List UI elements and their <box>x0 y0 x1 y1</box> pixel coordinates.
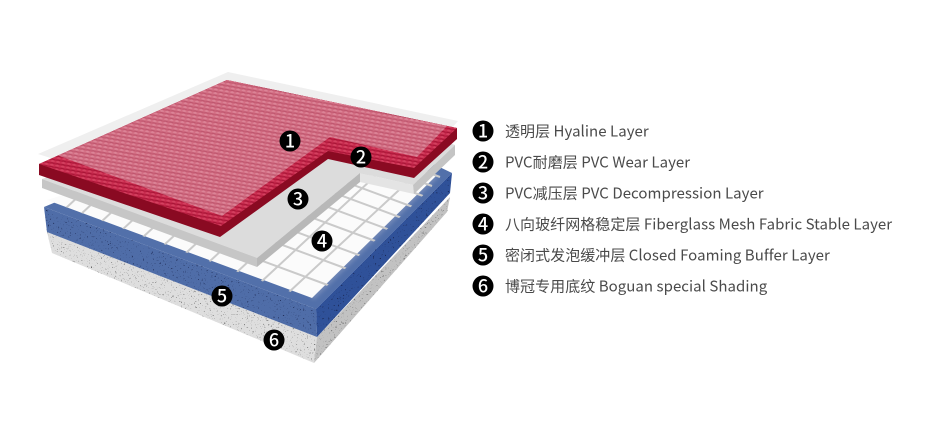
legend row 1: 1 <box>478 118 488 144</box>
legend row 6: 6 <box>478 272 488 298</box>
layer 5: closed foaming buffer <box>44 164 452 337</box>
marker 6: 6 <box>269 326 279 352</box>
marker 5 <box>212 282 232 308</box>
marker 3 <box>288 186 308 212</box>
layer 1: hyaline <box>38 72 458 161</box>
legend row 6: 博冠专用底纹 Boguan special Shading <box>505 276 768 296</box>
marker 4 <box>312 228 332 254</box>
layer 3: PVC decompression <box>42 90 455 267</box>
layer 4: fiberglass mesh <box>54 171 440 298</box>
legend row 5: 密闭式发泡缓冲层 Closed Foaming Buffer Layer <box>505 244 830 266</box>
legend row 2: 2 <box>478 148 488 174</box>
legend <box>472 118 892 298</box>
legend row 4: 4 <box>478 210 488 236</box>
marker 5: 5 <box>217 282 227 308</box>
marker 1 <box>280 128 300 154</box>
legend row 1 <box>472 118 649 144</box>
legend row 4: 八向玻纤网格稳定层 Fiberglass Mesh Fabric Stable Layer <box>505 214 892 234</box>
layer 6: base shading <box>47 197 450 363</box>
legend row 3: 3 <box>478 180 488 206</box>
diagram: layered floor cross-section <box>38 70 460 370</box>
legend row 2 <box>472 148 690 174</box>
marker 3: 3 <box>293 186 303 212</box>
marker 1: 1 <box>285 128 295 154</box>
legend row 3: PVC减压层 PVC Decompression Layer <box>505 182 764 204</box>
legend row 5: 5 <box>478 242 488 268</box>
layer 2: PVC wear <box>39 80 457 237</box>
legend row 1: 透明层 Hyaline Layer <box>505 120 649 142</box>
marker 4: 4 <box>317 228 327 254</box>
marker 2 <box>350 144 372 170</box>
marker 2: 2 <box>356 144 366 170</box>
legend row 2: PVC耐磨层 PVC Wear Layer <box>505 152 690 172</box>
marker 6 <box>264 326 284 352</box>
